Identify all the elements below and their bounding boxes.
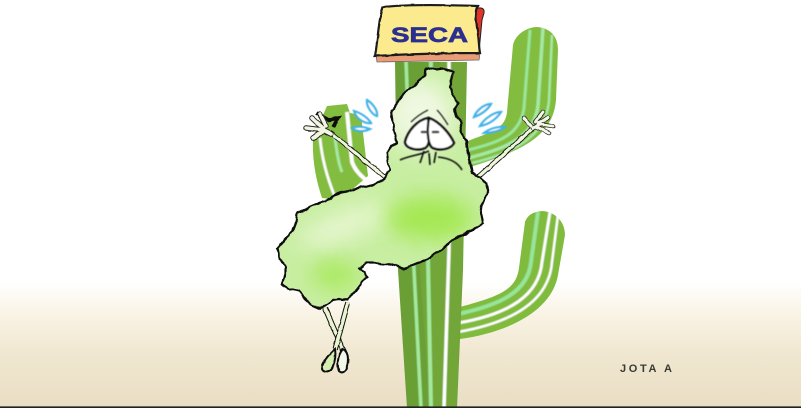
left arm — [330, 132, 392, 183]
sign: SECA — [375, 5, 484, 62]
cactus — [305, 20, 570, 408]
left eye — [405, 118, 430, 149]
drop left middle — [354, 111, 371, 123]
cactus: upper right arm — [468, 27, 558, 166]
drop left top — [367, 100, 377, 116]
leg two — [335, 302, 348, 350]
character: map body — [270, 60, 495, 310]
left hand — [316, 113, 338, 127]
right arm — [477, 128, 533, 178]
map fill — [278, 69, 488, 308]
signature: JOTA A — [620, 363, 672, 375]
map outline — [278, 68, 488, 308]
drop right bottom — [484, 127, 505, 133]
character: face — [400, 110, 462, 170]
sweat drops — [352, 100, 505, 133]
drop left bottom — [352, 127, 370, 131]
leg one — [325, 308, 344, 352]
right eye — [428, 118, 454, 149]
pupils — [422, 131, 438, 133]
cactus: trunk — [395, 62, 467, 406]
sign: yellow board — [375, 5, 480, 56]
character: legs and feet — [322, 302, 348, 372]
cactus: left arm — [312, 104, 368, 199]
sign: red scroll roll — [472, 8, 484, 52]
sign: text: SECA — [391, 24, 468, 47]
sign: salmon base — [376, 53, 480, 62]
frame edge — [0, 406, 801, 408]
mouth — [400, 151, 462, 170]
brows — [411, 110, 448, 125]
drop right top — [474, 104, 491, 117]
character: arms — [306, 112, 553, 183]
foot two — [338, 349, 348, 372]
cactus: lower right arm — [460, 211, 565, 339]
foot one — [322, 349, 335, 371]
drop right middle — [480, 112, 501, 126]
right hand — [524, 112, 553, 133]
